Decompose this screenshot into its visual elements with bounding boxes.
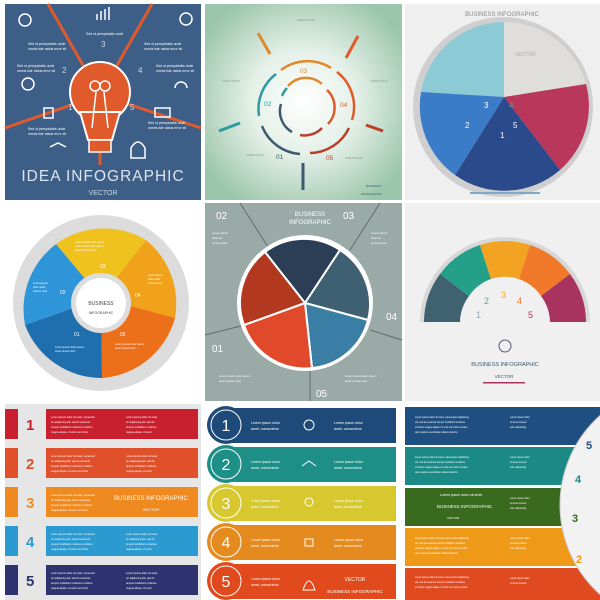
panel: rounded bands with circles: 1 xyxy=(222,418,231,435)
panel: idea infographic: Sed ut perspiciatis unde xyxy=(156,64,193,68)
panel: five-part ring: LOREM IPSUM xyxy=(246,154,264,157)
panel: donut: 01 xyxy=(74,332,80,338)
panel: horizontal bands with numbers: tur adipiscing elit, sed do eiusmod xyxy=(51,420,91,424)
panel: donut: consec tetur xyxy=(148,281,162,285)
panel: five-part ring: LOREM IPSUM xyxy=(345,157,363,160)
panel: bands with right arc: et dolore magna aliqua. Ut enim ad minim veniam xyxy=(415,426,468,429)
panel: five-part ring: LOREM IPSUM xyxy=(297,19,315,22)
panel: pie with grey background: BUSINESS xyxy=(295,212,325,218)
panel: donut: Lorem ipsum xyxy=(148,273,163,277)
panel: horizontal bands with numbers: tur adipiscing elit, sed do xyxy=(126,420,155,424)
panel: donut: Lorem ipsum xyxy=(33,281,48,285)
panel: idea infographic: Sed ut perspiciatis unde xyxy=(28,42,65,46)
panel: semicircle: 3 xyxy=(501,290,506,300)
panel: bands with right arc: VECTOR xyxy=(447,516,460,520)
panel: semicircle: VECTOR xyxy=(495,374,514,379)
panel: rounded bands with circles: VECTOR xyxy=(345,577,366,583)
panel: horizontal bands with numbers: magna aliqua. Ut enim ad minim xyxy=(51,469,88,473)
panel: horizontal bands with numbers: 2 xyxy=(26,456,34,473)
panel: semicircle: 2 xyxy=(484,296,489,306)
panel: donut: 05 xyxy=(120,332,126,338)
panel: five-part circle: 2 xyxy=(465,121,470,130)
panel: horizontal bands with numbers: Lorem ipsum dolor sit amet, consectet xyxy=(51,454,95,458)
panel: bands with right arc: sit amet consec xyxy=(510,582,527,585)
panel: bands with right arc: quis nostrud exercitation ullamco laboris xyxy=(415,431,458,434)
panel: idea infographic: omnis iste natus error sit xyxy=(28,132,66,136)
panel: idea infographic: Sed ut perspiciatis unde xyxy=(17,64,54,68)
panel: idea infographic: 5 xyxy=(130,103,135,112)
panel: pie with grey background: amet consec tetur xyxy=(345,379,367,383)
panel: horizontal bands with numbers: magna aliqua. Ut enim ad minim xyxy=(51,547,88,551)
panel: horizontal bands with numbers: tempor incididunt ut labore xyxy=(126,581,157,585)
panel: five-part ring: 03 xyxy=(300,68,308,75)
panel: pie with grey background: amet consec tetur xyxy=(219,379,241,383)
panel: idea infographic: Sed ut perspiciatis unde xyxy=(28,127,65,131)
panel: bands with right arc: sit amet consec xyxy=(510,542,527,545)
panel: donut: Lorem ipsum dolor ipsum xyxy=(115,342,144,346)
panel: pie with grey background: INFOGRAPHIC xyxy=(289,220,332,226)
panel: donut: amet consec tetur xyxy=(55,349,76,353)
panel: horizontal bands with numbers: Lorem ipsum dolor sit amet xyxy=(126,454,158,458)
arc with numbers: 2 xyxy=(576,554,582,566)
panel: donut: 02 xyxy=(60,290,66,296)
panel: semicircle: 1 xyxy=(476,310,481,320)
panel: bands with right arc: Lorem ipsum dolor sit amet, consectetur adipiscing xyxy=(415,416,469,419)
panel: rounded bands with circles: amet, consectetur xyxy=(251,466,280,470)
panel: horizontal bands with numbers: tur adipiscing elit, sed do eiusmod xyxy=(51,459,91,463)
panel: rounded bands with circles: amet, consectetur xyxy=(251,427,280,431)
panel: horizontal bands with numbers: magna aliqua. Ut enim xyxy=(126,547,152,551)
panel: horizontal bands with numbers: tempor incididunt ut labore xyxy=(126,464,157,468)
chart: pie xyxy=(420,22,589,191)
panel: horizontal bands with numbers: tur adipiscing elit, sed do eiusmod xyxy=(51,576,91,580)
panel: bands with right arc: sit amet consec xyxy=(510,421,527,424)
panel: horizontal bands with numbers: tur adipiscing elit, sed do eiusmod xyxy=(51,498,91,502)
panel: horizontal bands with numbers: tur adipiscing elit, sed do xyxy=(126,459,155,463)
panel: five-part ring: 04 xyxy=(340,102,348,109)
panel: idea infographic: 2 xyxy=(62,66,67,75)
panel: rounded bands with circles: Lorem ipsum dolor xyxy=(334,538,364,542)
panel: donut: dolor amet xyxy=(148,277,161,281)
panel: horizontal bands with numbers: magna aliqua. Ut enim xyxy=(126,469,152,473)
panel: idea infographic: 4 xyxy=(138,66,143,75)
panel: donut: amet consec tetur ipsum xyxy=(75,244,103,248)
panel: bands with right arc: BUSINESS INFOGRAPHIC xyxy=(437,504,493,509)
panel: rounded bands with circles: Lorem ipsum dolor xyxy=(251,499,281,503)
panel: donut: 03 xyxy=(100,264,106,270)
panel: donut: Lorem ipsum dolor ipsum xyxy=(75,240,104,244)
panel: rounded bands with circles: 5 xyxy=(222,574,231,591)
panel: pie with grey background: 01 xyxy=(212,344,224,355)
panel: pie with grey background: amet consec xyxy=(371,241,387,245)
panel: horizontal bands with numbers: tur adipiscing elit, sed do xyxy=(126,537,155,541)
panel: five-part circle: 3 xyxy=(484,101,489,110)
panel: pie with grey background: 04 xyxy=(386,312,398,323)
panel: rounded bands with circles: amet, consectetur xyxy=(251,544,280,548)
panel: horizontal bands with numbers xyxy=(5,404,201,600)
panel: rounded bands with circles: amet, consectetur xyxy=(251,505,280,509)
arc with numbers: 3 xyxy=(572,513,578,525)
panel: rounded bands with circles: Lorem ipsum dolor xyxy=(334,499,364,503)
panel: idea infographic xyxy=(5,4,201,200)
panel: five-part ring: 02 xyxy=(264,101,272,108)
panel: five-part ring: 01 xyxy=(276,154,284,161)
panel: horizontal bands with numbers: tempor incididunt ut labore et dolore xyxy=(51,581,93,585)
panel: rounded bands with circles: 2 xyxy=(222,457,231,474)
panel: pie with grey background: Lorem ipsum xyxy=(212,231,229,235)
panel: idea infographic: Sed ut perspiciatis unde xyxy=(144,42,181,46)
panel: idea infographic: 3 xyxy=(101,40,106,49)
panel: five-part circle: 5 xyxy=(513,121,518,130)
panel: bands with right arc: Lorem ipsum dolor sit amet, consectetur adipiscing xyxy=(415,456,469,459)
arc with numbers: 4 xyxy=(575,474,582,486)
chart: pie xyxy=(240,239,370,368)
panel: horizontal bands with numbers: magna aliqua. Ut enim ad minim xyxy=(51,430,88,434)
panel: horizontal bands with numbers: magna aliqua. Ut enim xyxy=(126,430,152,434)
panel: horizontal bands with numbers: tempor incididunt ut labore et dolore xyxy=(51,542,93,546)
panel: donut: 04 xyxy=(135,293,141,299)
panel: rounded bands with circles: Lorem ipsum dolor xyxy=(251,577,281,581)
panel: bands with right arc: Lorem ipsum dolor sit amet, consectetur adipiscing xyxy=(415,537,469,540)
panel: idea infographic: Sed ut perspiciatis unde xyxy=(148,121,185,125)
panel: bands with right arc: sit amet consec xyxy=(510,502,527,505)
arc with numbers xyxy=(560,385,600,600)
panel: horizontal bands with numbers: Lorem ipsum dolor sit amet xyxy=(126,415,158,419)
panel: pie with grey background xyxy=(205,203,402,401)
panel: five-part ring: LOREM IPSUM xyxy=(370,80,388,83)
panel: horizontal bands with numbers: 5 xyxy=(26,573,34,590)
panel: bands with right arc: Lorem ipsum dolor xyxy=(510,577,530,580)
panel: idea infographic: omnis iste natus error sit xyxy=(17,69,55,73)
panel: bands with right arc: quis nostrud exercitation ullamco laboris xyxy=(415,552,458,555)
panel: semicircle: BUSINESS INFOGRAPHIC xyxy=(471,362,539,368)
panel: horizontal bands with numbers: Lorem ipsum dolor sit amet, consectet xyxy=(51,493,95,497)
panel: bands with right arc: Lorem ipsum dolor xyxy=(510,456,530,459)
panel: horizontal bands with numbers: tempor incididunt ut labore et dolore xyxy=(51,425,93,429)
panel: bands with right arc: Lorem ipsum dolor xyxy=(510,416,530,419)
panel: rounded bands with circles: 4 xyxy=(222,535,231,552)
panel: bands with right arc: tetur adipiscing xyxy=(510,507,527,510)
panel: semicircle xyxy=(405,203,600,401)
panel: rounded bands with circles: amet, consectetur xyxy=(334,466,363,470)
panel: donut: dolor amet xyxy=(33,285,46,289)
panel: pie with grey background: 03 xyxy=(343,211,355,222)
panel: bands with right arc: elit, sed do eiusmod tempor incididunt ut labore xyxy=(415,421,466,424)
panel: horizontal bands with numbers: Lorem ipsum dolor sit amet xyxy=(126,571,158,575)
panel: donut xyxy=(5,203,201,401)
panel: five-part ring xyxy=(205,4,402,200)
panel: pie with grey background: dolor sit xyxy=(212,236,222,240)
panel: donut: Lorem ipsum dolor ipsum xyxy=(55,345,84,349)
panel: semicircle: 4 xyxy=(517,296,522,306)
title: IDEA INFOGRAPHIC xyxy=(21,168,185,185)
panel: donut: amet consec tetur xyxy=(115,346,136,350)
panel: rounded bands with circles: Lorem ipsum dolor xyxy=(251,538,281,542)
panel: horizontal bands with numbers: tempor incididunt ut labore xyxy=(126,425,157,429)
panel: horizontal bands with numbers: Lorem ipsum dolor sit amet, consectet xyxy=(51,415,95,419)
panel: bands with right arc: elit, sed do eiusmod tempor incididunt ut labore xyxy=(415,461,466,464)
panel: donut: INFOGRAPHIC xyxy=(89,311,114,315)
panel: rounded bands with circles: amet, consectetur xyxy=(251,583,280,587)
icons xyxy=(19,7,192,158)
panel: bands with right arc: elit, sed do eiusmod tempor incididunt ut labore xyxy=(415,542,466,545)
panel: donut: scing elit sed do ei xyxy=(75,248,97,252)
panel: five-part ring: BUSINESS xyxy=(366,184,381,188)
panel: idea infographic: VECTOR xyxy=(88,190,118,197)
panel: horizontal bands with numbers: 3 xyxy=(26,495,34,512)
panel: bands with right arc: et dolore magna aliqua. Ut enim ad minim veniam xyxy=(415,586,468,589)
panel: idea infographic: omnis iste natus error sit xyxy=(144,47,182,51)
panel: horizontal bands with numbers: tempor incididunt ut labore et dolore xyxy=(51,464,93,468)
panel: idea infographic: 1 xyxy=(68,103,73,112)
panel: bands with right arc: Lorem ipsum dolor sit amet xyxy=(440,493,482,497)
panel: five-part ring: LOREM IPSUM xyxy=(222,80,240,83)
panel: bands with right arc: quis nostrud exercitation ullamco laboris xyxy=(415,471,458,474)
arc with numbers: 5 xyxy=(586,440,592,452)
panel: pie with grey background: 05 xyxy=(316,389,328,400)
panel: idea infographic: omnis iste natus error sit xyxy=(148,126,186,130)
panel: rounded bands with circles: Lorem ipsum dolor xyxy=(251,460,281,464)
panel: rounded bands with circles: amet, consectetur xyxy=(334,505,363,509)
panel: bands with right arc: tetur adipiscing xyxy=(510,426,527,429)
panel: pie with grey background: amet consec xyxy=(212,241,228,245)
icon: light bulb xyxy=(70,62,130,152)
panel: horizontal bands with numbers: tempor incididunt ut labore et dolore xyxy=(51,503,93,507)
panel: rounded bands with circles: BUSINESS INFOGRAPHIC xyxy=(327,589,383,594)
panel: five-part circle: VECTOR xyxy=(515,52,536,58)
panel: rounded bands with circles: Lorem ipsum dolor xyxy=(334,421,364,425)
panel: donut: consec tetur xyxy=(33,289,47,293)
panel: rounded bands with circles: amet, consectetur xyxy=(334,544,363,548)
panel: pie with grey background: Lorem ipsum dolor ipsum xyxy=(345,374,377,378)
panel: bands with right arc xyxy=(405,385,600,600)
panel: rounded bands with circles: Lorem ipsum dolor xyxy=(334,460,364,464)
panel: idea infographic: omnis iste natus error sit xyxy=(28,47,66,51)
panel: horizontal bands with numbers: Lorem ipsum dolor sit amet xyxy=(126,532,158,536)
panel: horizontal bands with numbers: VECTOR xyxy=(143,507,159,512)
panel: horizontal bands with numbers: Lorem ipsum dolor sit amet, consectet xyxy=(51,571,95,575)
panel: horizontal bands with numbers: tur adipiscing elit, sed do eiusmod xyxy=(51,537,91,541)
panel: horizontal bands with numbers: BUSINESS INFOGRAPHIC xyxy=(114,496,189,502)
panel: horizontal bands with numbers: 1 xyxy=(26,417,34,434)
panel: horizontal bands with numbers: magna aliqua. Ut enim xyxy=(126,586,152,590)
panel: horizontal bands with numbers: magna aliqua. Ut enim ad minim xyxy=(51,508,88,512)
panel: horizontal bands with numbers: magna aliqua. Ut enim ad minim xyxy=(51,586,88,590)
panel: five-part circle: 4 xyxy=(509,101,514,110)
panel: donut: BUSINESS xyxy=(88,301,114,307)
panel: bands with right arc: et dolore magna aliqua. Ut enim ad minim veniam xyxy=(415,466,468,469)
panel: bands with right arc: Lorem ipsum dolor xyxy=(510,537,530,540)
panel: pie with grey background: 02 xyxy=(216,211,228,222)
panel: pie with grey background: Lorem ipsum dolor ipsum xyxy=(219,374,251,378)
chart: segmented ring xyxy=(258,61,354,154)
panel: rounded bands with circles: amet, consectetur xyxy=(334,427,363,431)
panel: five-part circle xyxy=(405,4,600,200)
panel: rounded bands with circles xyxy=(205,404,402,600)
panel: horizontal bands with numbers: 4 xyxy=(26,534,35,551)
panel: pie with grey background: Lorem ipsum xyxy=(371,231,388,235)
panel: rounded bands with circles: 3 xyxy=(222,496,231,513)
panel: idea infographic: omnis iste natus error sit xyxy=(156,69,194,73)
panel: semicircle: 5 xyxy=(528,310,533,320)
panel: pie with grey background: dolor sit xyxy=(371,236,381,240)
panel: five-part ring: 05 xyxy=(326,155,334,162)
panel: five-part ring: INFOGRAPHIC xyxy=(361,192,383,196)
panel: five-part circle: BUSINESS INFOGRAPHIC xyxy=(465,12,540,18)
panel: bands with right arc: Lorem ipsum dolor xyxy=(510,497,530,500)
panel: horizontal bands with numbers: tur adipiscing elit, sed do xyxy=(126,576,155,580)
chart: half ring xyxy=(424,241,586,322)
panel: horizontal bands with numbers: tempor incididunt ut labore xyxy=(126,542,157,546)
panel: bands with right arc: tetur adipiscing xyxy=(510,547,527,550)
panel: rounded bands with circles: Lorem ipsum dolor xyxy=(251,421,281,425)
panel: bands with right arc: et dolore magna aliqua. Ut enim ad minim veniam xyxy=(415,547,468,550)
panel: bands with right arc: tetur adipiscing xyxy=(510,466,527,469)
panel: bands with right arc: elit, sed do eiusmod tempor incididunt ut labore xyxy=(415,581,466,584)
panel: idea infographic: Sed ut perspiciatis unde xyxy=(86,32,123,36)
panel: horizontal bands with numbers: Lorem ipsum dolor sit amet, consectet xyxy=(51,532,95,536)
chart: donut segments xyxy=(23,228,176,378)
panel: five-part circle: 1 xyxy=(500,131,505,140)
panel: bands with right arc: Lorem ipsum dolor sit amet, consectetur adipiscing xyxy=(415,576,469,579)
panel: bands with right arc: sit amet consec xyxy=(510,461,527,464)
